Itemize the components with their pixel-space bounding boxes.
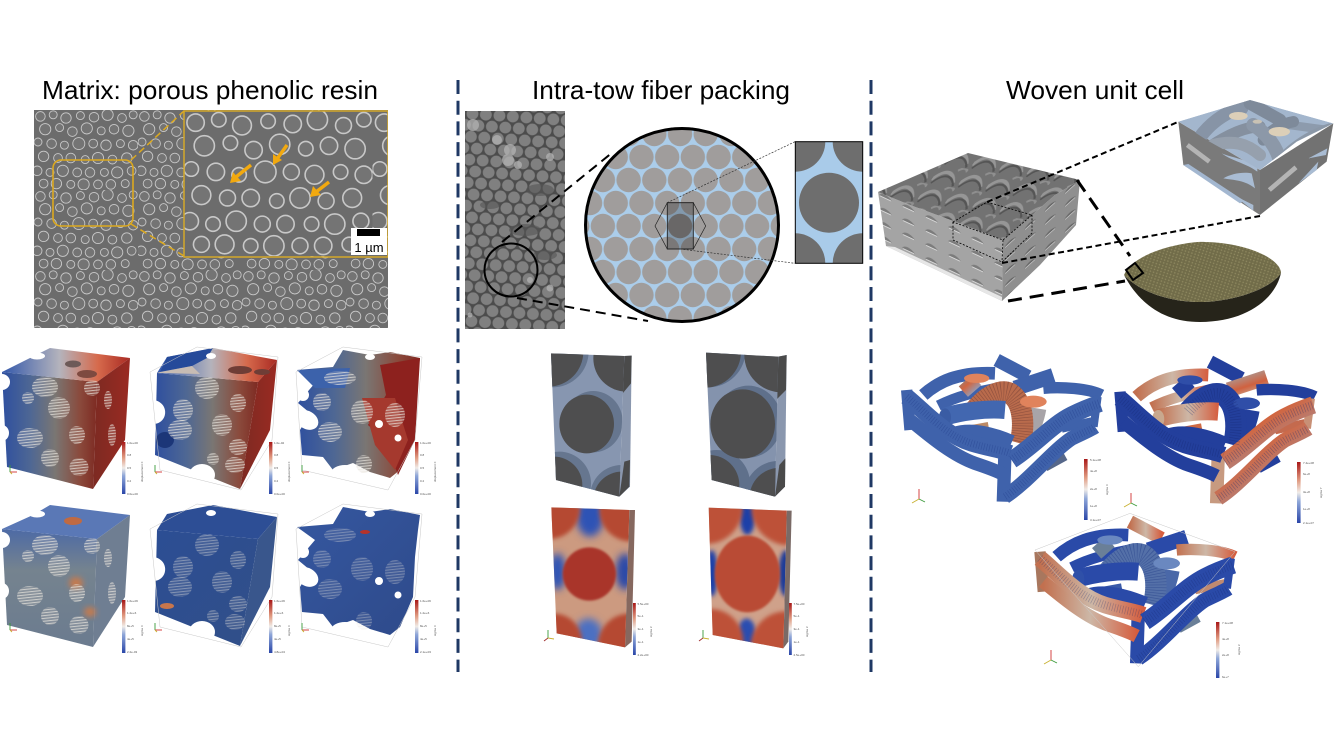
render: displacement cube A <box>0 348 130 489</box>
zoom connector lines <box>131 111 184 256</box>
divider: right <box>870 80 872 672</box>
colorbar: fiber stress left: 1e-1 <box>638 640 644 644</box>
colorbar: cube A: 0.5 <box>127 466 132 470</box>
sample square marker <box>1126 263 1143 280</box>
hexagon cell outline <box>655 203 706 249</box>
colorbar: cube E: 4e+5 <box>274 637 281 641</box>
colorbar: fiber stress left: 5e-1 <box>638 614 644 618</box>
colorbar: fiber stress left <box>633 602 653 657</box>
colorbar: cube D: 2.2e-03 <box>127 650 138 654</box>
region selection box <box>53 160 133 226</box>
top surface <box>1178 100 1333 170</box>
colorbar: fiber stress left: 5.5e+00 <box>638 602 649 606</box>
colorbar: cube F: sigma X <box>433 625 437 636</box>
colorbar: cube E: 1.6e+06 <box>274 599 285 603</box>
colorbar: cube A: 0.8 <box>127 453 132 457</box>
colorbar: tow figure C: sigma Z <box>1237 644 1241 655</box>
colorbar: cube C: 0.5 <box>420 466 425 470</box>
colorbar: tow figure C: 4e+8 <box>1222 637 1229 641</box>
colorbar: fiber stress right: 5e-1 <box>794 614 800 618</box>
enlarged unit cell <box>794 141 864 264</box>
zoom connector: upper <box>502 152 613 242</box>
axis triads: middle panel <box>544 630 709 641</box>
colorbar: tow figure B <box>1297 461 1323 525</box>
render: fiber stress map right <box>708 508 792 648</box>
colorbar: cube A <box>122 441 144 496</box>
render: tow stress figure B <box>1120 362 1315 503</box>
render: fiber block geometry right <box>706 352 787 497</box>
colorbar: cube A: 1.0e+00 <box>127 441 138 445</box>
colorbar: cube D: sigma X <box>140 625 144 636</box>
colorbar: cube D: 1.2e+6 <box>127 611 137 615</box>
colorbar: tow figure A: 2e+8 <box>1090 487 1097 491</box>
rectangular unit cell highlight <box>667 203 693 249</box>
thin connector lines to unit cell <box>667 142 795 263</box>
arrows: pore indicators <box>230 145 329 197</box>
connector: block to unit cell upper <box>987 122 1178 202</box>
render: fiber stress map left <box>551 507 635 648</box>
colorbar: tow figure B: 2.1e+07 <box>1303 521 1314 525</box>
zoom connector: lower <box>517 298 648 321</box>
selection circle on fiber SEM <box>484 244 538 296</box>
central fiber shade <box>668 214 692 238</box>
colorbar: fiber stress left: 2.2e+00 <box>638 653 649 657</box>
tow stripes on faces <box>1187 145 1296 190</box>
colorbar: cube F: 2.1e+03 <box>420 650 431 654</box>
colorbar: cube C: displacement X <box>433 461 437 482</box>
colorbar: tow figure A: sigma X <box>1105 484 1109 495</box>
connector: block to unit cell lower <box>1002 216 1260 263</box>
colorbar: cube C: 0.0e+00 <box>420 492 431 496</box>
colorbar: cube E: 8e+5 <box>274 624 281 628</box>
colorbar: tow figure C: 7.1e+08 <box>1222 621 1233 625</box>
divider: left <box>456 80 460 672</box>
inset: magnified SEM <box>184 111 388 257</box>
colorbar: cube B: 1.0e-02 <box>274 441 285 445</box>
colorbar: tow figure B: 7.4e+08 <box>1303 461 1314 465</box>
colorbar: cube F: 4e+5 <box>420 637 427 641</box>
colorbar: cube D <box>122 599 144 654</box>
render: fiber block geometry left <box>551 353 632 497</box>
colorbar: cube B: 0.8 <box>274 453 279 457</box>
axis triads: right panel <box>912 489 1137 664</box>
scale bar: 1 µm <box>354 240 384 255</box>
colorbar: tow figure A <box>1084 458 1109 522</box>
colorbar: cube B: 0.5 <box>274 466 279 470</box>
colorbar: cube E: 4.8e+04 <box>274 650 285 654</box>
colorbar: tow figure A: 4e+8 <box>1090 469 1097 473</box>
title: intra-tow fiber packing: Intra-tow fiber packing <box>532 75 790 105</box>
colorbar: fiber stress right: sigma Z <box>805 626 809 637</box>
colorbar: tow figure A: 5.1e+08 <box>1090 458 1101 462</box>
packing circle diagram <box>586 128 778 322</box>
render: stress cube E <box>150 504 278 647</box>
colorbar: cube D: 8e+5 <box>127 624 134 628</box>
render: woven block <box>878 153 1080 301</box>
panel: SEM of fiber tow <box>465 111 565 329</box>
title: woven unit cell: Woven unit cell <box>1006 75 1184 105</box>
axis triads: left panel <box>10 465 309 632</box>
colorbar: cube E: 1.2e+6 <box>274 611 284 615</box>
render: stress cube D <box>0 505 130 647</box>
scale bar <box>351 228 387 255</box>
connector: heavy disc to block lower <box>1008 281 1125 301</box>
infographic canvas <box>2 80 1334 678</box>
colorbar: tow figure B: 3e+8 <box>1303 490 1310 494</box>
colorbar: tow figure B: sigma Y <box>1319 487 1323 498</box>
title: matrix: Matrix: porous phenolic resin <box>42 75 378 105</box>
panel: SEM micrograph of porous resin <box>34 110 388 328</box>
colorbar: fiber stress right: 2.5e+00 <box>794 653 805 657</box>
colorbar: fiber stress left: sigma Z <box>649 626 653 637</box>
connector: heavy disc to block upper <box>1077 180 1130 256</box>
colorbar: tow figure A: 1e+8 <box>1090 504 1097 508</box>
colorbar: cube A: displacement X <box>140 461 144 482</box>
colorbar: tow figure B: 1e+8 <box>1303 507 1310 511</box>
colorbar: cube F: 1.2e+6 <box>420 611 430 615</box>
colorbar: fiber stress right: 1e-1 <box>794 640 800 644</box>
render: tow stress figure C <box>1035 513 1235 667</box>
colorbar: cube C: 0.8 <box>420 453 425 457</box>
dashed sub-volume outline <box>953 202 1032 262</box>
colorbar: cube B <box>269 441 291 496</box>
colorbar: fiber stress right <box>789 602 809 657</box>
render: displacement cube C <box>292 347 422 490</box>
colorbar: cube B: displacement X <box>287 461 291 482</box>
colorbar: tow figure B: 6e+8 <box>1303 472 1310 476</box>
colorbar: tow figure C: 6e+7 <box>1222 675 1229 679</box>
colorbar: cube A: 0.2 <box>127 479 132 483</box>
gaps on faces <box>1222 148 1327 211</box>
colorbar: cube E: sigma X <box>287 625 291 636</box>
colorbar: tow figure A: 3.1e+07 <box>1090 518 1101 522</box>
colorbar: fiber stress right: 3e-1 <box>794 627 800 631</box>
render: tow stress figure A <box>907 360 1102 502</box>
colorbar: tow figure C: 2e+8 <box>1222 653 1229 657</box>
bright speckled fibers <box>467 119 554 318</box>
colorbar: cube B: 0.0e+00 <box>274 492 285 496</box>
colorbar: fiber stress right: 7.5e+00 <box>794 602 805 606</box>
colorbar: cube C <box>415 441 437 496</box>
render: woven unit cell close-up <box>1178 100 1333 215</box>
colorbar: cube F: 1.6e+06 <box>420 599 431 603</box>
darker matrix patches <box>480 184 557 260</box>
render: stress cube F <box>292 504 422 647</box>
colorbar: cube D: 4e+5 <box>127 637 134 641</box>
colorbar: cube A: 0.0e+00 <box>127 492 138 496</box>
colorbar: cube B: 0.2 <box>274 479 279 483</box>
colorbar: cube F <box>415 599 437 654</box>
colorbar: cube D: 1.6e+06 <box>127 599 138 603</box>
colorbar: cube C: 1.0e+00 <box>420 441 431 445</box>
colorbar: cube C: 0.2 <box>420 479 425 483</box>
colorbar: fiber stress left: 3e-1 <box>638 627 644 631</box>
colorbar: tow figure C <box>1216 621 1241 679</box>
photo: woven disc specimen <box>1124 242 1281 322</box>
render: displacement cube B <box>150 347 278 490</box>
colorbar: cube E <box>269 599 291 654</box>
colorbar: cube F: 8e+5 <box>420 624 427 628</box>
